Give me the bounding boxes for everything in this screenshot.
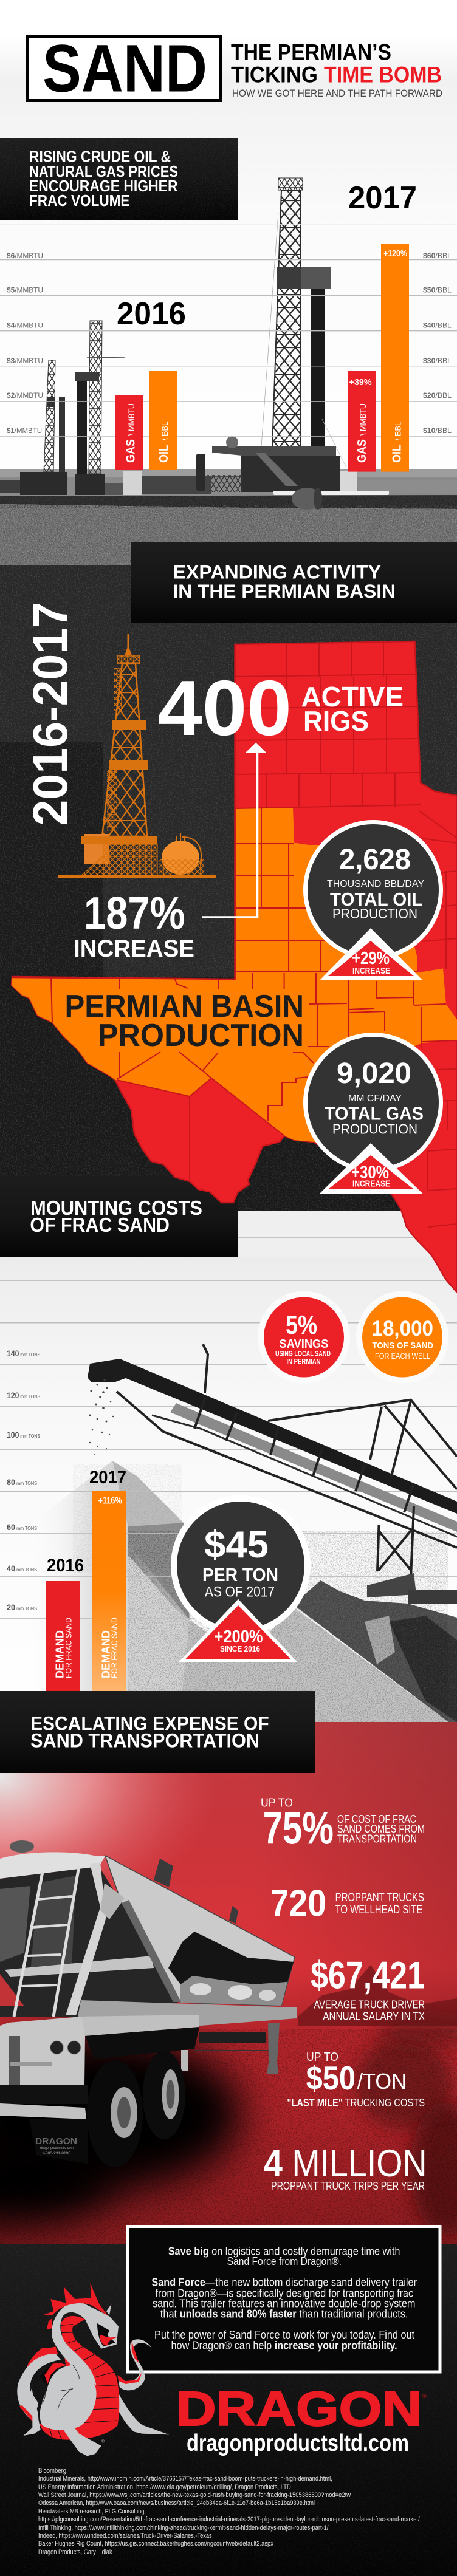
text block: sources: Indeed, https://www.indeed.com/salaries/Truck-Driver-Salaries,-Texas: [38, 2532, 212, 2540]
text block: sources: Wall Street Journal, https://www.wsj.com/articles/the-new-texas-gold-rush-buying-sand-for-fracking-1505386800?mod=e2tw: [38, 2492, 351, 2499]
title block: SAND: [43, 32, 207, 106]
banner: expanding activity heading: EXPANDING ACTIVITY: [173, 561, 381, 583]
axis labels: oil price: $40/BBL: [423, 321, 452, 329]
bar: 2017 gas: [348, 371, 376, 472]
panel: footer background: [0, 2244, 457, 2576]
photo: conveyor: [88, 1344, 457, 1604]
bar: 2017 sand demand: +116%: [98, 1495, 122, 1506]
badge: 18,000 tons: 18,000: [372, 1317, 433, 1341]
banner: escalating expense heading: ESCALATING EXPENSE OF: [30, 1713, 269, 1735]
banner: escalating expense heading: SAND TRANSPORTATION: [30, 1730, 259, 1752]
banner: rising prices heading: ENCOURAGE HIGHER: [29, 177, 178, 195]
callout: total gas production: 9,020: [337, 1057, 411, 1090]
section background: frac sand: [0, 1211, 457, 1725]
callout: total oil production: +29%: [352, 949, 390, 968]
panel: Sand Force call to action: that unloads sand 80% faster than traditional products.: [160, 2308, 408, 2320]
stat: 720 trucks: TO WELLHEAD SITE: [335, 1904, 422, 1916]
callout: total oil production: 2,628: [339, 844, 411, 876]
stat: last mile cost: UP TO: [306, 2051, 338, 2064]
stat: last mile cost: "LAST MILE" TRUCKING COSTS: [287, 2097, 425, 2109]
bar labels: GAS: [125, 439, 138, 463]
stat: last mile cost: /TON: [357, 2069, 407, 2094]
axis labels: gas price: $4/MMBTU: [7, 321, 43, 329]
text block: sources: US Energy Information Administration, https://www.eia.gov/petroleum/drilling/, Dragon Products, LTD: [38, 2484, 291, 2491]
icon: orange oil rig: [58, 634, 216, 878]
bar: 2017 sand demand: DEMAND: [100, 1630, 112, 1678]
badge: 18,000 tons: TONS OF SAND: [372, 1341, 433, 1351]
bar labels: +39%: [349, 377, 372, 388]
map: Texas: [12, 641, 457, 1293]
heading: mounting costs: MOUNTING COSTS: [30, 1197, 202, 1219]
stat: 400 active rigs: [157, 664, 404, 752]
bar: 2017 sand demand: FOR FRAC SAND: [109, 1618, 119, 1678]
callout: total oil production: TOTAL OIL: [330, 889, 423, 910]
banner: rising prices heading: [0, 138, 238, 220]
axis labels: oil price: $20/BBL: [423, 391, 452, 400]
bar: 2016 gas: [115, 395, 143, 470]
axis labels: sand tons: 100 mm TONS: [7, 1430, 40, 1440]
stat: 75% of cost: [261, 1797, 425, 1854]
icon: dragon mascot: [17, 2283, 169, 2456]
bar: 2016 sand demand: 2016: [47, 1556, 84, 1576]
banner: rising prices heading: FRAC VOLUME: [29, 191, 130, 210]
heading: Permian Basin production: [64, 989, 304, 1053]
callout: total oil production: THOUSAND BBL/DAY: [327, 879, 424, 889]
grid lines: price chart: [0, 225, 457, 437]
callout: total oil production: INCREASE: [352, 966, 390, 976]
panel: Sand Force call to action: Sand Force—the new bottom discharge sand delivery trailer: [151, 2277, 417, 2289]
heading: Permian Basin production: PRODUCTION: [98, 1018, 304, 1053]
text block: sources: Infill Thinking, https://www.infillthinking.com/thinking-ahead/trucking-kermit-sand-hidden-delays-major-routes-part-1/: [38, 2524, 329, 2532]
icon: dragon mascot: ®: [101, 2439, 105, 2444]
stat: 720 trucks: 720: [270, 1883, 326, 1925]
stat: 187% increase: [74, 887, 194, 962]
text block: sources: Industrial Minerals, http://www.indmin.com/Article/3766157/Texas-frac-sand-boom-puts-truckers-in-high-demand.html,: [38, 2475, 332, 2482]
year label: 2017: 2017: [348, 180, 417, 216]
banner: escalating expense heading: [0, 1691, 315, 1773]
title block: [27, 32, 442, 106]
callout: $45 per ton: SINCE 2016: [220, 1644, 260, 1653]
axis labels: sand tons: 140 mm TONS: [7, 1348, 40, 1358]
text block: sources: Bloomberg,: [38, 2467, 68, 2475]
axis labels: gas price: $5/MMBTU: [7, 285, 43, 294]
title block: THE PERMIAN’S: [231, 40, 391, 65]
banner: rising prices heading: NATURAL GAS PRICES: [29, 162, 178, 180]
callout: total gas production: INCREASE: [352, 1179, 390, 1189]
panel: Sand Force call to action: Save big on logistics and costly demurrage time with: [168, 2245, 400, 2257]
photo: sand piles: [24, 1461, 457, 1722]
callout: $45 per ton: +200%: [214, 1627, 263, 1647]
stat: last mile cost: $50: [306, 2059, 356, 2097]
heading: mounting costs: [30, 1197, 202, 1236]
bar: 2016 sand demand: [46, 1556, 84, 1691]
bar labels: OIL: [157, 445, 171, 463]
stat: 75% of cost: TRANSPORTATION: [337, 1833, 417, 1845]
stat: 720 trucks: [270, 1883, 424, 1925]
bar labels: GAS: [356, 439, 369, 463]
heading: mounting costs: OF FRAC SAND: [30, 1214, 170, 1236]
panel: red desert sky and road: [0, 1722, 457, 2244]
callout: total gas production: [303, 1033, 443, 1194]
photo: bottom discharge trailer: 1-800-231-8198: [42, 2151, 70, 2156]
panel: Permian basin dark background: [0, 565, 457, 1211]
panel: Sand Force call to action: how Dragon® can help increase your profitability.: [171, 2339, 397, 2351]
bar: 2017 sand demand: 2017: [89, 1467, 126, 1488]
bar: 2017 oil: [381, 244, 409, 472]
stat: 400 active rigs: RIGS: [303, 705, 369, 737]
stat: 4 million trips: 4 MILLION: [264, 2142, 427, 2185]
axis labels: sand tons: 60 mm TONS: [7, 1522, 37, 1532]
callout: total gas production: PRODUCTION: [332, 1121, 417, 1137]
badge: 18,000 tons: FOR EACH WELL: [375, 1351, 430, 1361]
bar: 2017 sand demand: [89, 1467, 126, 1691]
bar labels: \ MMBTU: [358, 403, 368, 436]
text block: sources: [38, 2467, 420, 2556]
stat: average driver salary: $67,421: [311, 1955, 425, 1997]
callout: $45 per ton: PER TON: [202, 1564, 278, 1585]
bar labels: +120%: [383, 248, 407, 259]
axis labels: oil price: $10/BBL: [423, 426, 452, 435]
stat: 75% of cost: UP TO: [261, 1797, 293, 1810]
stat: 187% increase: INCREASE: [74, 935, 194, 962]
photo: bottom discharge trailer: dragonproductsltd.com: [40, 2147, 74, 2150]
text block: sources: Odessa American, http://www.oaoa.com/news/business/article_24eb34ea-6f1e-11e7-be6a-1b15e1ba939e.html: [38, 2499, 315, 2507]
panel: Sand Force call to action: Sand Force from Dragon®.: [227, 2255, 342, 2267]
bar labels: \ BBL: [160, 422, 170, 440]
heading: 2016-2017 vertical: 2016-2017: [23, 602, 77, 826]
callout: total oil production: PRODUCTION: [332, 906, 417, 921]
badge: 5% savings: [258, 1291, 350, 1384]
title block: TICKING: [231, 62, 318, 87]
panel: Sand Force call to action: [128, 2227, 440, 2372]
bar labels: \ BBL: [393, 422, 402, 440]
stat: 75% of cost: 75%: [263, 1803, 334, 1854]
stat: 187% increase: 187%: [84, 887, 185, 938]
axis labels: oil price: $50/BBL: [423, 285, 452, 294]
text block: sources: Baker Hughes Rig Count, https://us.gis.connect.bakerhughes.com/rigcountweb/default2.aspx: [38, 2540, 273, 2547]
arrow: increase to rigs: [202, 743, 266, 917]
axis labels: gas price: $2/MMBTU: [7, 391, 43, 400]
callout: total oil production: [303, 820, 443, 980]
photo: drilling rigs and field: [0, 178, 457, 565]
logo: Dragon wordmark: DRAGON: [176, 2382, 422, 2436]
stat: 75% of cost: OF COST OF FRAC: [337, 1812, 416, 1825]
title block: TIME BOMB: [324, 62, 442, 87]
axis labels: gas price: [7, 251, 43, 435]
stat: average driver salary: AVERAGE TRUCK DRIVER: [314, 1998, 425, 2011]
axis labels: gas price: $1/MMBTU: [7, 426, 42, 435]
bar: 2016 sand demand: DEMAND: [53, 1630, 66, 1678]
banner: rising prices heading: RISING CRUDE OIL &: [29, 147, 171, 165]
stat: 400 active rigs: ACTIVE: [301, 681, 404, 712]
stat: 400 active rigs: 400: [157, 664, 292, 752]
callout: $45 per ton: AS OF 2017: [205, 1584, 275, 1601]
year label: 2016: 2016: [117, 296, 186, 332]
grid lines: sand chart: [0, 1238, 457, 1618]
bar labels: \ MMBTU: [126, 403, 136, 436]
badge: 5% savings: 5%: [286, 1310, 317, 1340]
logo: Dragon wordmark: ®: [422, 2393, 427, 2399]
stat: 75% of cost: SAND COMES FROM: [337, 1822, 425, 1835]
bar: 2016 sand demand: FOR FRAC SAND: [63, 1618, 73, 1678]
bar: 2016 oil: [149, 371, 177, 470]
callout: total gas production: +30%: [351, 1163, 389, 1183]
axis labels: sand tons: 40 mm TONS: [7, 1563, 37, 1573]
photo: bottom discharge trailer: DRAGON: [35, 2136, 77, 2147]
bar labels: [125, 248, 407, 463]
axis labels: oil price: $60/BBL: [423, 251, 452, 260]
badge: 5% savings: USING LOCAL SAND: [275, 1351, 331, 1358]
stat: last mile cost: [287, 2051, 425, 2109]
panel: Sand Force call to action: from Dragon®—is specifically designed for transporting frac: [156, 2287, 413, 2300]
badge: 5% savings: SAVINGS: [280, 1338, 328, 1351]
axis labels: oil price: $30/BBL: [423, 357, 452, 365]
text block: sources: Headwaters MB research, PLG Consulting,: [38, 2508, 146, 2515]
banner: expanding activity heading: [131, 542, 457, 623]
axis labels: oil price: [423, 251, 452, 435]
panel: Sand Force call to action: Put the power of Sand Force to work for you today. Find out: [154, 2329, 414, 2341]
callout: $45 per ton: [171, 1495, 311, 1662]
badge: 18,000 tons: [356, 1291, 448, 1384]
banner: expanding activity heading: IN THE PERMIAN BASIN: [173, 580, 396, 602]
axis labels: gas price: $6/MMBTU: [7, 251, 43, 260]
text block: sources: Dragon Products, Gary Lidiak: [38, 2549, 112, 2556]
website address: dragonproductsltd.com: [187, 2430, 409, 2456]
stat: average driver salary: [311, 1955, 425, 2023]
axis labels: sand tons: 20 mm TONS: [7, 1602, 37, 1612]
page background: rising prices section: [0, 0, 457, 504]
axis labels: sand tons: 80 mm TONS: [7, 1477, 37, 1487]
panel: Sand Force call to action: sand. This trailer features an innovative double-drop system: [153, 2298, 416, 2310]
axis labels: sand tons: [7, 1348, 40, 1612]
callout: $45 per ton: $45: [204, 1524, 269, 1566]
callout: total gas production: TOTAL GAS: [325, 1103, 424, 1124]
bar labels: OIL: [390, 445, 404, 463]
stat: average driver salary: ANNUAL SALARY IN TX: [323, 2009, 425, 2023]
photo: bottom discharge trailer: [0, 1840, 297, 2167]
heading: Permian Basin production: PERMIAN BASIN: [64, 989, 304, 1024]
axis labels: gas price: $3/MMBTU: [7, 357, 43, 365]
callout: total gas production: MM CF/DAY: [348, 1093, 402, 1104]
badge: 5% savings: IN PERMIAN: [287, 1358, 321, 1365]
banner background: mounting costs: [0, 1176, 238, 1257]
axis labels: sand tons: 120 mm TONS: [7, 1390, 40, 1400]
stat: 720 trucks: PROPPANT TRUCKS: [335, 1891, 424, 1904]
